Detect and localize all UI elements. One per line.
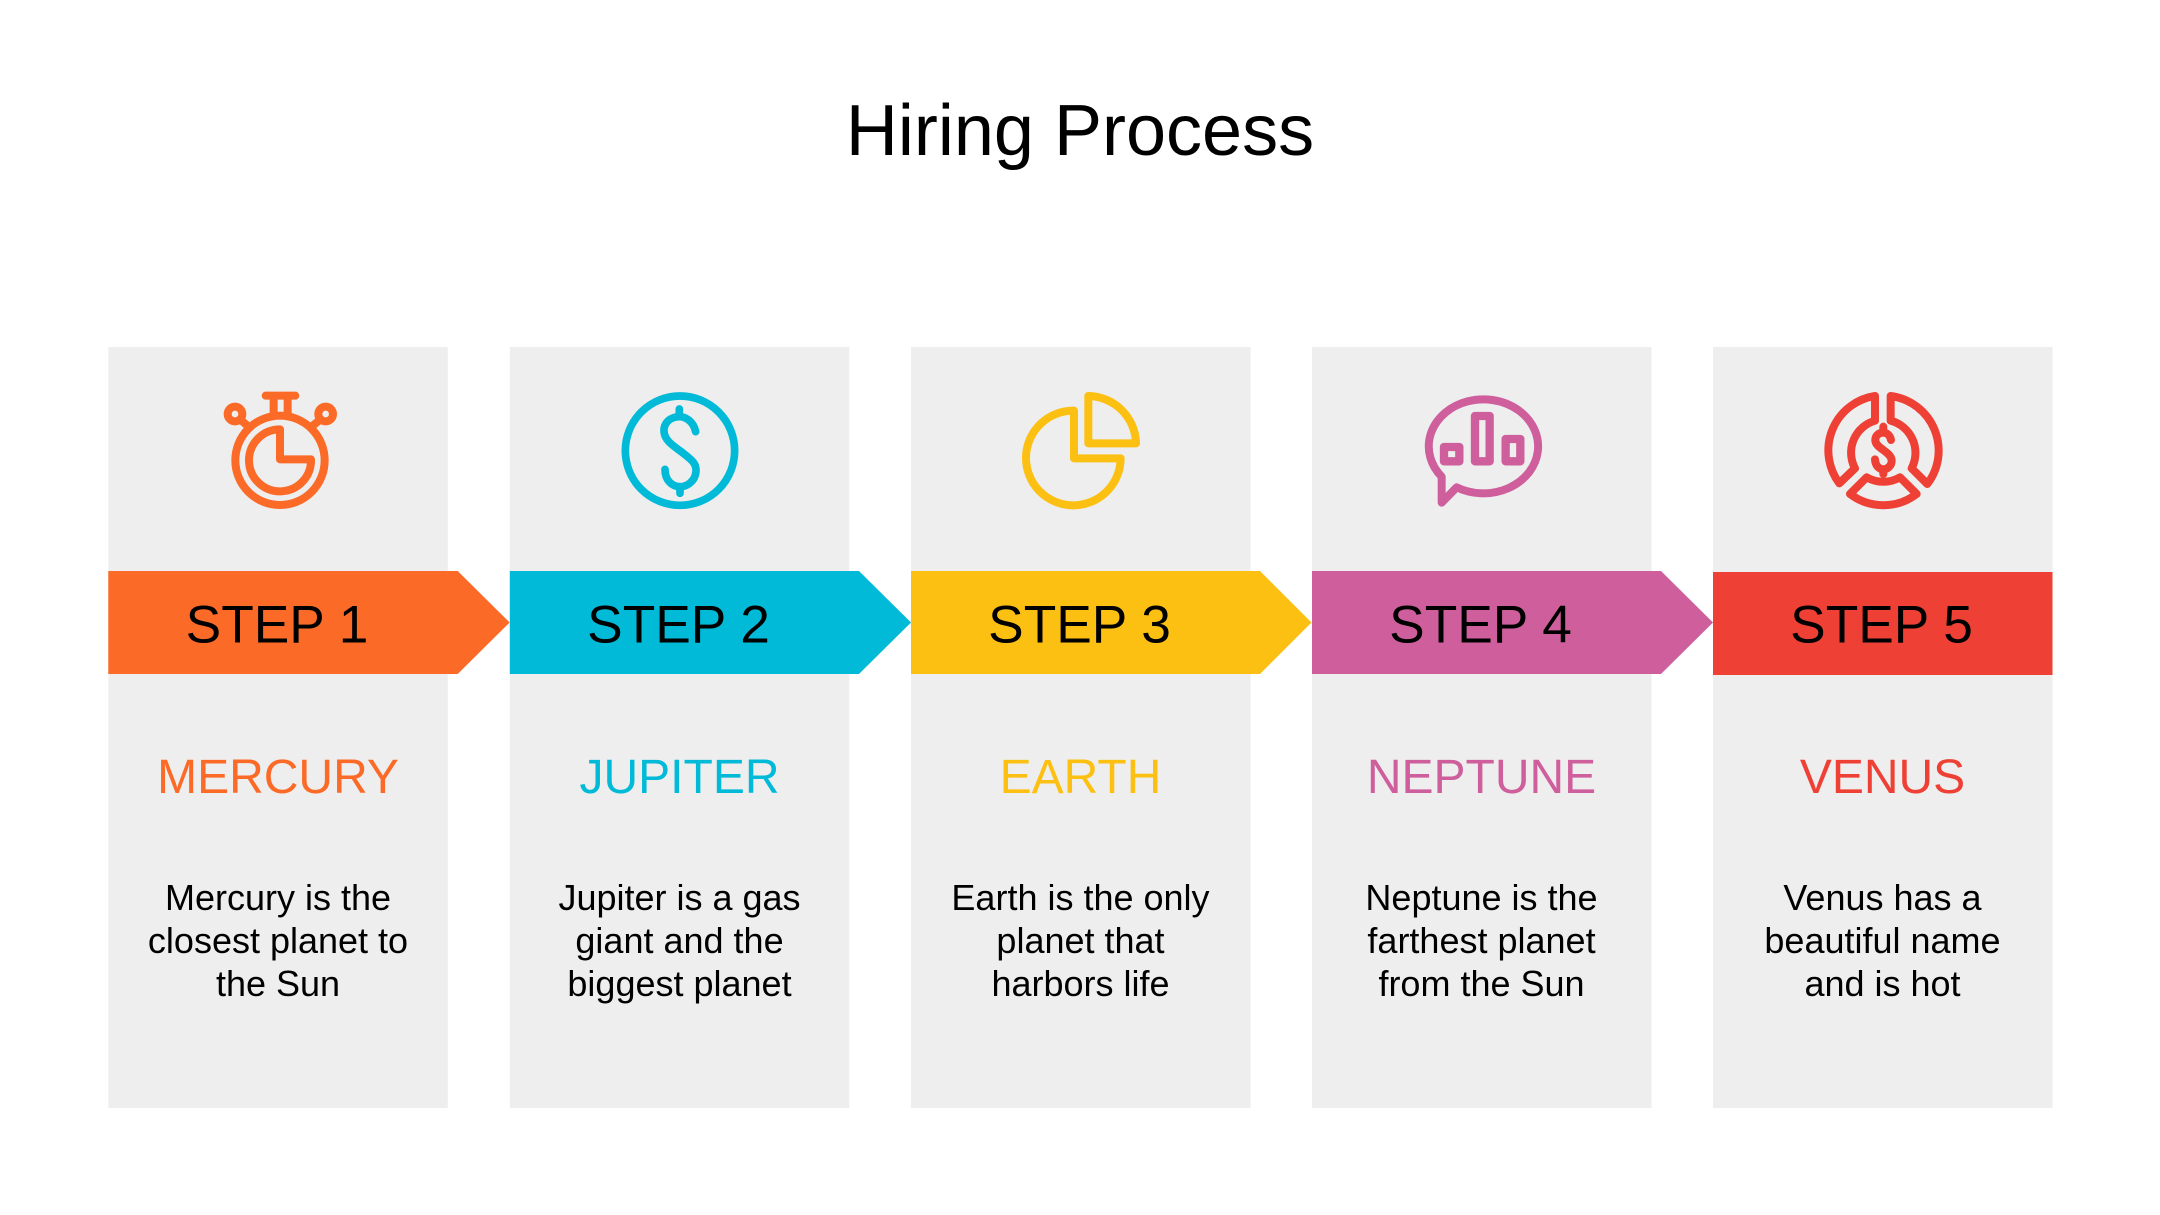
planet name: jupiter: JUPITER (579, 751, 780, 804)
description: neptune: from the Sun (1378, 963, 1585, 1004)
description: jupiter: giant and the (575, 920, 784, 961)
description: neptune: Neptune is the (1365, 877, 1598, 918)
panel: step 1 mercury (108, 347, 510, 1108)
icon: dollar donut chart (1828, 396, 1939, 505)
icon: pie chart (1026, 396, 1136, 505)
planet name: mercury: MERCURY (157, 751, 399, 804)
description: venus: Venus has a (1783, 877, 1983, 918)
arrow: step 3 banner (911, 571, 1312, 674)
banner: step 5 (1713, 572, 2052, 675)
step label 1: STEP 1 (186, 596, 368, 654)
step label 3: STEP 3 (988, 596, 1171, 654)
step label 5: STEP 5 (1790, 596, 1973, 654)
arrow: step 1 banner (108, 571, 510, 674)
description: neptune: farthest planet (1367, 920, 1596, 961)
panel: step 5 venus (1713, 347, 2052, 1108)
description: venus: beautiful name (1764, 920, 2001, 961)
description: jupiter: biggest planet (567, 963, 792, 1004)
panel: step 2 jupiter (510, 347, 911, 1108)
planet name: venus: VENUS (1800, 751, 1965, 804)
description: earth: harbors life (991, 963, 1170, 1004)
description: mercury: Mercury is the (165, 877, 391, 918)
arrow: step 2 banner (510, 571, 911, 674)
panel: step 4 neptune (1312, 347, 1713, 1108)
description: mercury: closest planet to (148, 920, 408, 961)
icon: chat bubble with bars (1429, 399, 1538, 503)
panel: step 3 earth (911, 347, 1312, 1108)
description: mercury: the Sun (216, 963, 340, 1004)
arrow: step 4 banner (1312, 571, 1713, 674)
planet name: neptune: NEPTUNE (1367, 751, 1596, 804)
description: jupiter: Jupiter is a gas (558, 877, 801, 918)
icon: stopwatch (228, 396, 333, 505)
step label 4: STEP 4 (1389, 596, 1572, 654)
step label 2: STEP 2 (587, 596, 770, 654)
description: venus: and is hot (1804, 963, 1961, 1004)
planet name: earth: EARTH (1000, 751, 1161, 804)
title: Hiring Process (846, 91, 1314, 171)
icon: dollar coin (625, 396, 735, 505)
description: earth: planet that (996, 920, 1165, 961)
description: earth: Earth is the only (951, 877, 1210, 918)
